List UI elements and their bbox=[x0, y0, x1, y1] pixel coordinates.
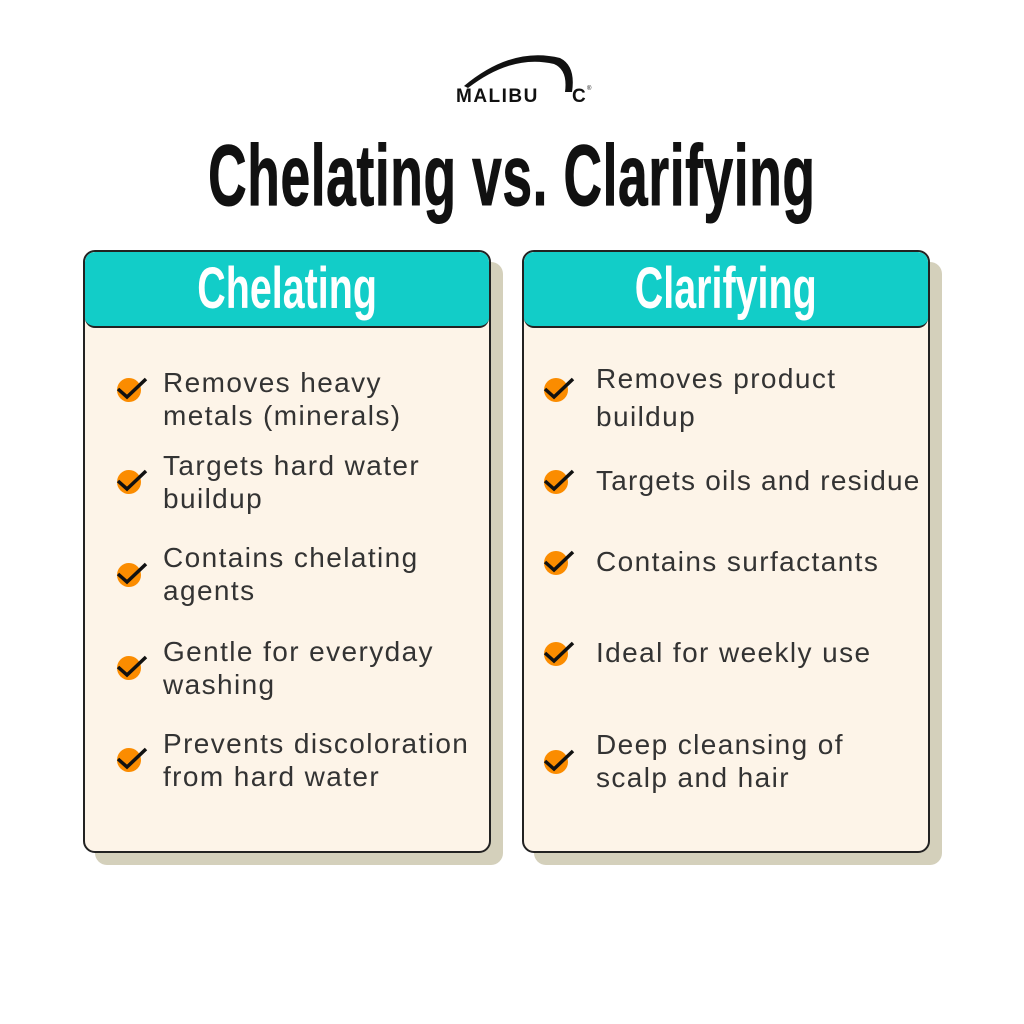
heading: chelating bbox=[85, 252, 489, 328]
item list clarifying: Removes product bbox=[596, 363, 836, 394]
item list chelating: Removes heavy bbox=[163, 367, 382, 398]
logo: MALIBU bbox=[456, 86, 539, 107]
item list clarifying bbox=[544, 363, 921, 793]
logo: ® bbox=[587, 85, 592, 92]
item list chelating: washing bbox=[163, 669, 276, 700]
item list chelating: buildup bbox=[163, 483, 263, 514]
item list clarifying: Deep cleansing of bbox=[596, 729, 844, 760]
heading: clarifying: Clarifying bbox=[635, 256, 817, 321]
heading: chelating: Chelating bbox=[197, 256, 377, 321]
title: Chelating vs. Clarifying bbox=[208, 128, 816, 224]
item list chelating: from hard water bbox=[163, 761, 380, 792]
item list chelating: Prevents discoloration bbox=[163, 728, 469, 759]
item list chelating: agents bbox=[163, 575, 255, 606]
panel: chelating bbox=[83, 250, 503, 865]
logo: C bbox=[572, 86, 586, 107]
logo bbox=[456, 55, 592, 107]
item list chelating: Targets hard water bbox=[163, 450, 420, 481]
heading: clarifying bbox=[524, 252, 928, 328]
item list clarifying: buildup bbox=[596, 401, 696, 432]
item list chelating: Gentle for everyday bbox=[163, 636, 434, 667]
item list chelating bbox=[116, 367, 469, 792]
panel: clarifying bbox=[522, 250, 942, 865]
item list chelating: Contains chelating bbox=[163, 542, 419, 573]
item list clarifying: Ideal for weekly use bbox=[596, 637, 871, 668]
item list clarifying: Targets oils and residue bbox=[596, 465, 921, 496]
item list clarifying: scalp and hair bbox=[596, 762, 790, 793]
item list clarifying: Contains surfactants bbox=[596, 546, 879, 577]
item list chelating: metals (minerals) bbox=[163, 400, 402, 431]
